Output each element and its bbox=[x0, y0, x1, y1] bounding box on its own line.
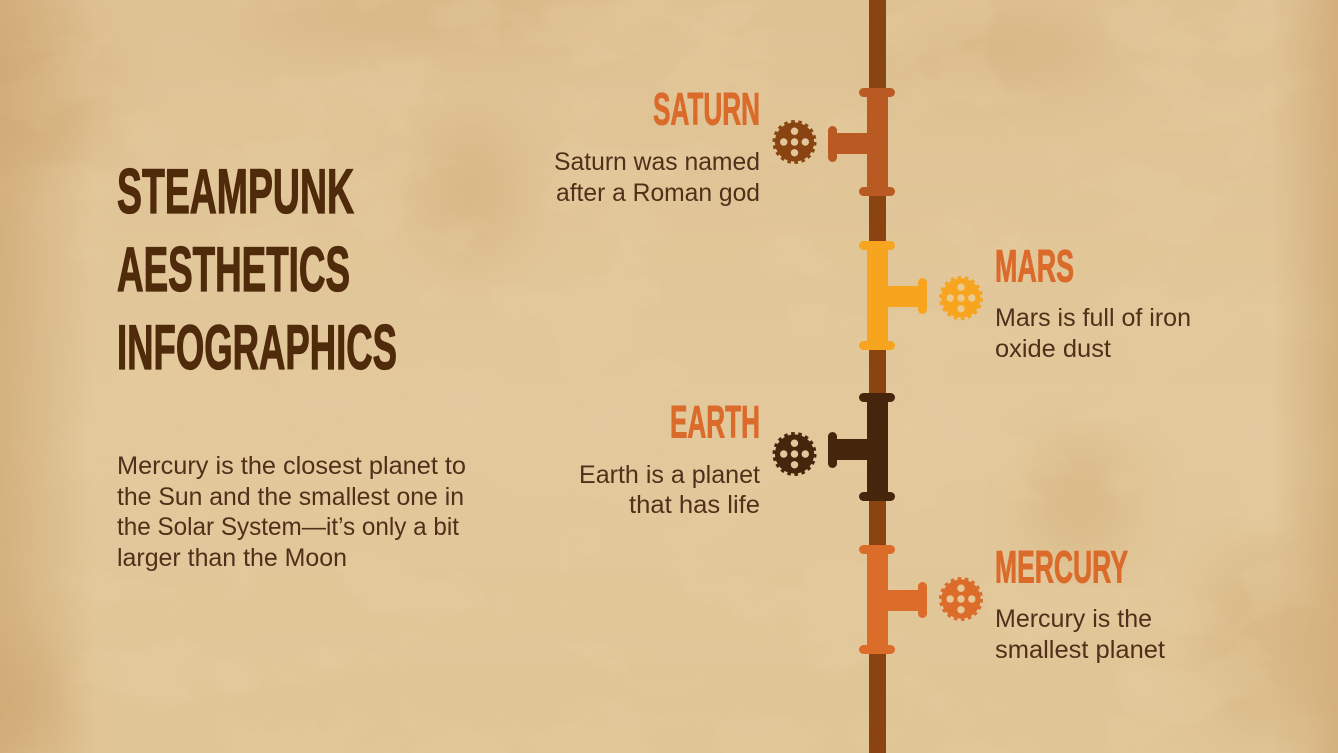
label: Earth bbox=[579, 396, 760, 519]
label: Mercury: smallest planet bbox=[995, 636, 1165, 664]
label: Earth: EARTH bbox=[670, 396, 760, 448]
label: Earth: that has life bbox=[629, 491, 760, 519]
label: Earth: Earth is a planet bbox=[579, 461, 760, 489]
title: AESTHETICS bbox=[117, 235, 350, 305]
label: Mars bbox=[995, 240, 1191, 363]
icon: Saturn gear bbox=[774, 122, 815, 162]
title bbox=[117, 157, 397, 383]
description text: larger than the Moon bbox=[117, 544, 347, 572]
pipe joint: Mars bbox=[859, 241, 927, 350]
label: Mars: oxide dust bbox=[995, 335, 1111, 363]
description text bbox=[117, 452, 466, 572]
label: Saturn: after a Roman god bbox=[556, 179, 760, 207]
title: INFOGRAPHICS bbox=[117, 313, 397, 383]
label: Mercury bbox=[995, 542, 1165, 664]
label: Mercury: MERCURY bbox=[995, 542, 1128, 592]
label: Mercury: Mercury is the bbox=[995, 605, 1152, 633]
description text: the Solar System—it’s only a bit bbox=[117, 513, 459, 541]
label: Mars: Mars is full of iron bbox=[995, 304, 1191, 332]
icon: Mars gear bbox=[940, 278, 982, 318]
label: Saturn bbox=[554, 84, 760, 207]
icon: Earth gear bbox=[774, 434, 815, 474]
pipe joint: Mercury bbox=[859, 545, 927, 654]
central pipe bbox=[869, 0, 886, 753]
description text: the Sun and the smallest one in bbox=[117, 483, 464, 511]
title: STEAMPUNK bbox=[117, 157, 354, 227]
icon: Mercury gear bbox=[940, 578, 982, 620]
description text: Mercury is the closest planet to bbox=[117, 452, 466, 480]
label: Mars: MARS bbox=[995, 240, 1074, 292]
pipe joint: Saturn bbox=[828, 88, 895, 196]
pipe joint: Earth bbox=[828, 393, 895, 501]
label: Saturn: Saturn was named bbox=[554, 148, 760, 176]
label: Saturn: SATURN bbox=[653, 84, 760, 134]
